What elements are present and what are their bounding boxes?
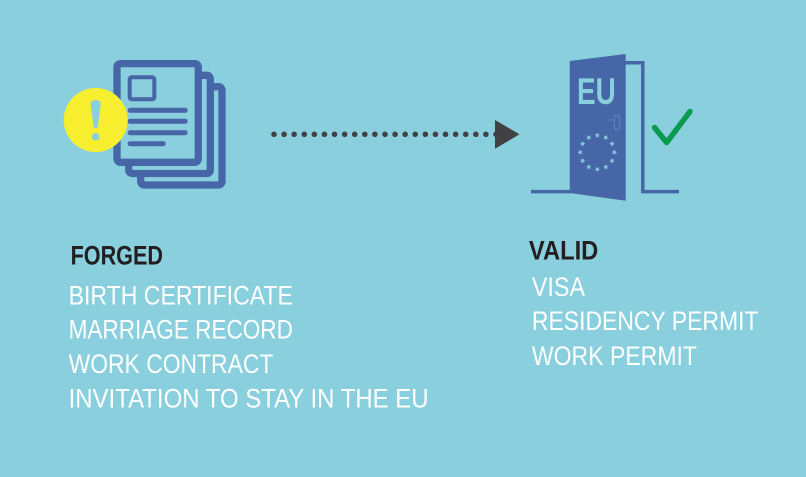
item: invitation to stay: INVITATION TO STAY IN THE EU [69, 384, 429, 414]
circle of twelve stars [577, 132, 617, 172]
icon: yellow warning badge [64, 88, 128, 152]
item: work contract: WORK CONTRACT [69, 349, 273, 379]
door frame and floor [531, 63, 679, 192]
arrow head [495, 120, 520, 149]
heading: valid: VALID [529, 235, 598, 265]
warning circle [64, 88, 128, 152]
item: residency permit: RESIDENCY PERMIT [532, 306, 758, 336]
icon: stack of forged documents [117, 64, 222, 185]
text lines [130, 110, 185, 144]
dotted line [274, 132, 497, 137]
item: visa: VISA [532, 272, 585, 302]
middle page [129, 75, 210, 174]
icon: open EU door [531, 54, 679, 201]
EU lettering: EU [577, 71, 616, 112]
front page [117, 64, 198, 162]
item: birth certificate: BIRTH CERTIFICATE [69, 280, 293, 310]
back page [141, 87, 222, 185]
door leaf [570, 54, 626, 201]
item: work permit: WORK PERMIT [532, 341, 697, 371]
icon: green check mark [654, 112, 690, 142]
arrow: dotted line from forged to valid [274, 120, 520, 149]
heading: forged: FORGED [71, 240, 163, 270]
door handle [608, 115, 620, 130]
list: forged documents [69, 280, 429, 414]
photo box [130, 77, 154, 99]
exclamation mark [91, 100, 101, 141]
item: marriage record: MARRIAGE RECORD [69, 314, 293, 344]
list: valid documents [532, 272, 758, 371]
